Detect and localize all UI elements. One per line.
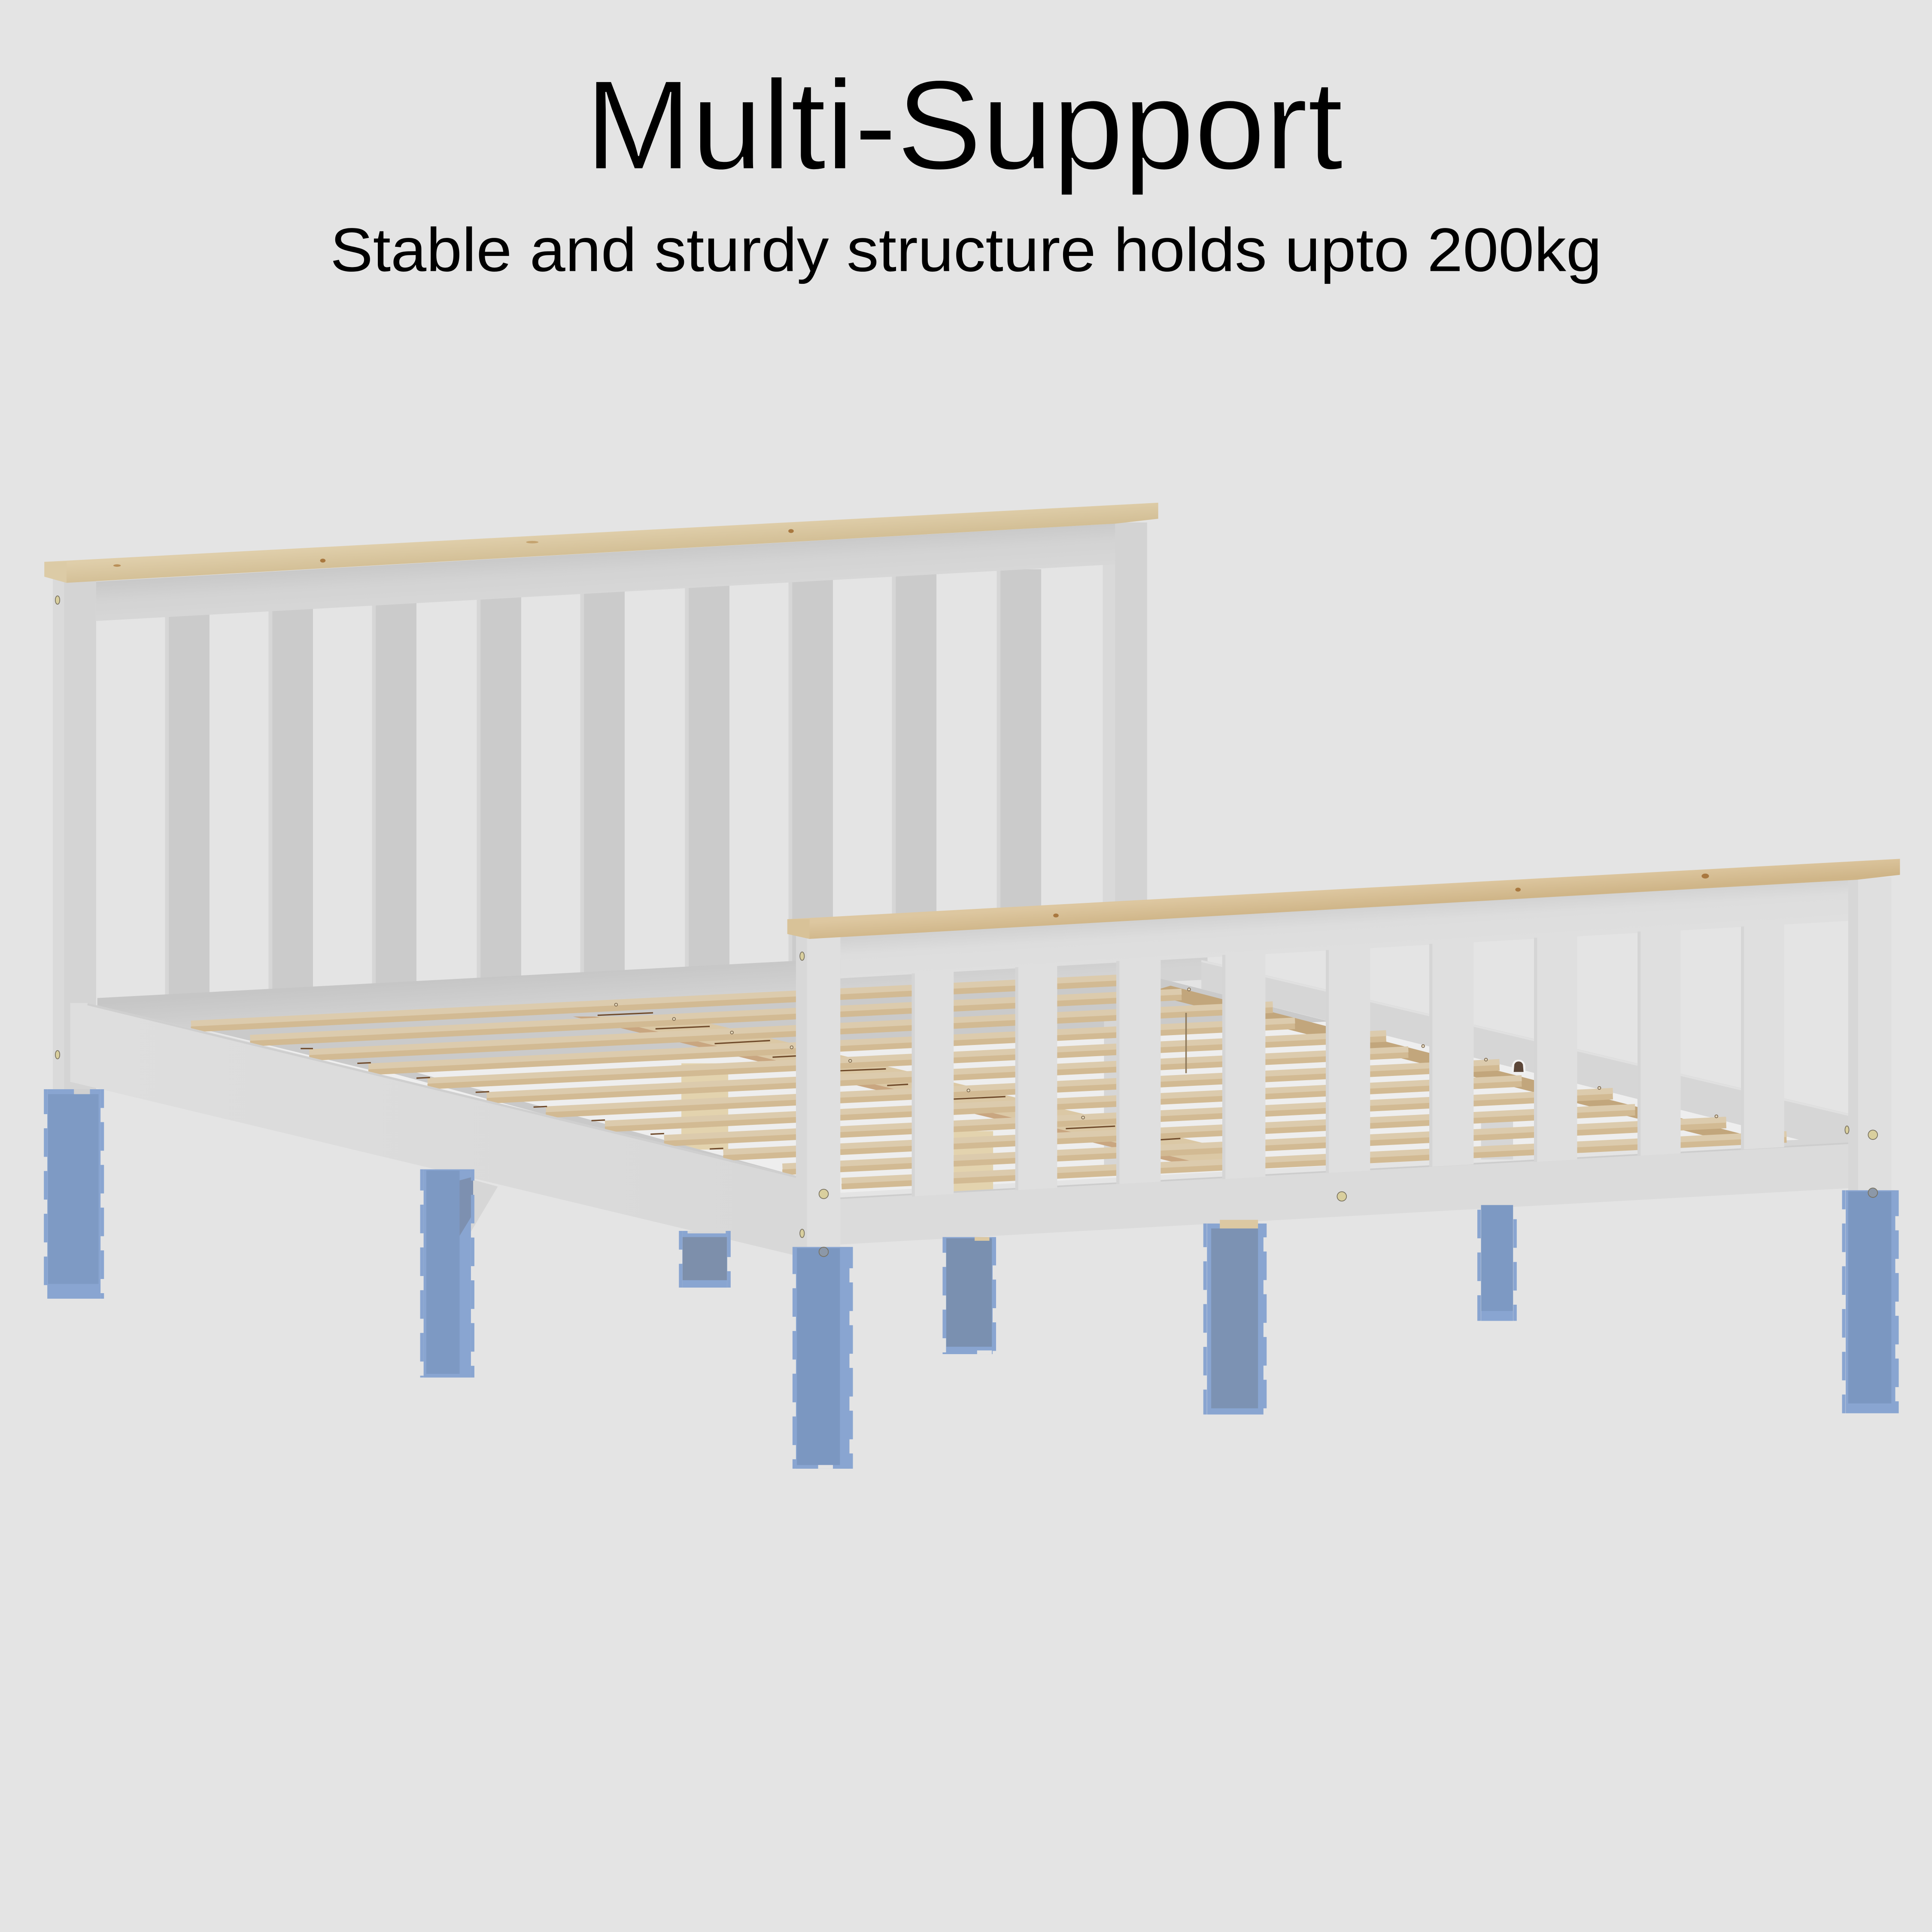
slat screws bbox=[615, 988, 1718, 1119]
dark slat joint marks bbox=[301, 1013, 1180, 1149]
leg 7 bbox=[1479, 1205, 1515, 1321]
centre support beam bbox=[573, 1017, 1291, 1164]
slat upper faces bbox=[191, 975, 1786, 1181]
left foot post bbox=[796, 934, 840, 1249]
right foot post bbox=[1848, 877, 1891, 1193]
hanging screw detail bbox=[1186, 1013, 1187, 1073]
footboard wood cap bbox=[787, 859, 1900, 939]
bracket bolt detail bbox=[1512, 1060, 1525, 1073]
leg 3 bbox=[680, 1231, 729, 1288]
far side rail bbox=[1201, 960, 1850, 1148]
floor seen through slats bbox=[191, 978, 1799, 1193]
centre support legs bbox=[681, 1063, 993, 1193]
leg 6 bbox=[1205, 1220, 1265, 1415]
head-end bed rail bbox=[97, 939, 1208, 1035]
grey shadow under upper slats bbox=[191, 978, 1330, 1069]
under-frame bracket bbox=[471, 1179, 498, 1232]
right slat ledge bbox=[1146, 986, 1750, 1141]
headboard slat highlights bbox=[165, 569, 1000, 997]
grey vertical supports bbox=[1104, 1020, 1513, 1170]
headboard slats bbox=[165, 569, 1041, 997]
footboard top rail bbox=[840, 880, 1857, 978]
bolts bbox=[55, 596, 1877, 1257]
footboard slat edges bbox=[912, 927, 1744, 1197]
slat base bbox=[191, 975, 1799, 1193]
leg 8 bbox=[1844, 1190, 1897, 1413]
bed frame illustration bbox=[44, 503, 1900, 1469]
headboard wood cap bbox=[44, 503, 1158, 583]
title: Multi-Support bbox=[585, 54, 1343, 197]
slat lower faces bbox=[191, 981, 1786, 1187]
headboard bbox=[44, 503, 1158, 1089]
left head post bbox=[53, 579, 96, 1089]
right head post bbox=[1103, 522, 1147, 942]
leg 2 bbox=[422, 1170, 473, 1378]
near side rail bbox=[70, 1003, 801, 1257]
left slat ledge bbox=[306, 1050, 813, 1180]
leg 4 bbox=[794, 1247, 851, 1469]
subtitle: Stable and sturdy structure holds upto 200kg bbox=[330, 216, 1602, 284]
leg 1 bbox=[46, 1089, 102, 1299]
wooden slats bbox=[191, 975, 1786, 1187]
headboard top rail bbox=[96, 524, 1115, 621]
leg 5 bbox=[944, 1237, 994, 1354]
support legs bbox=[46, 1089, 1897, 1469]
footboard bbox=[787, 859, 1900, 1249]
footboard slats bbox=[912, 924, 1784, 1197]
footboard bottom rail bbox=[840, 1142, 1857, 1245]
